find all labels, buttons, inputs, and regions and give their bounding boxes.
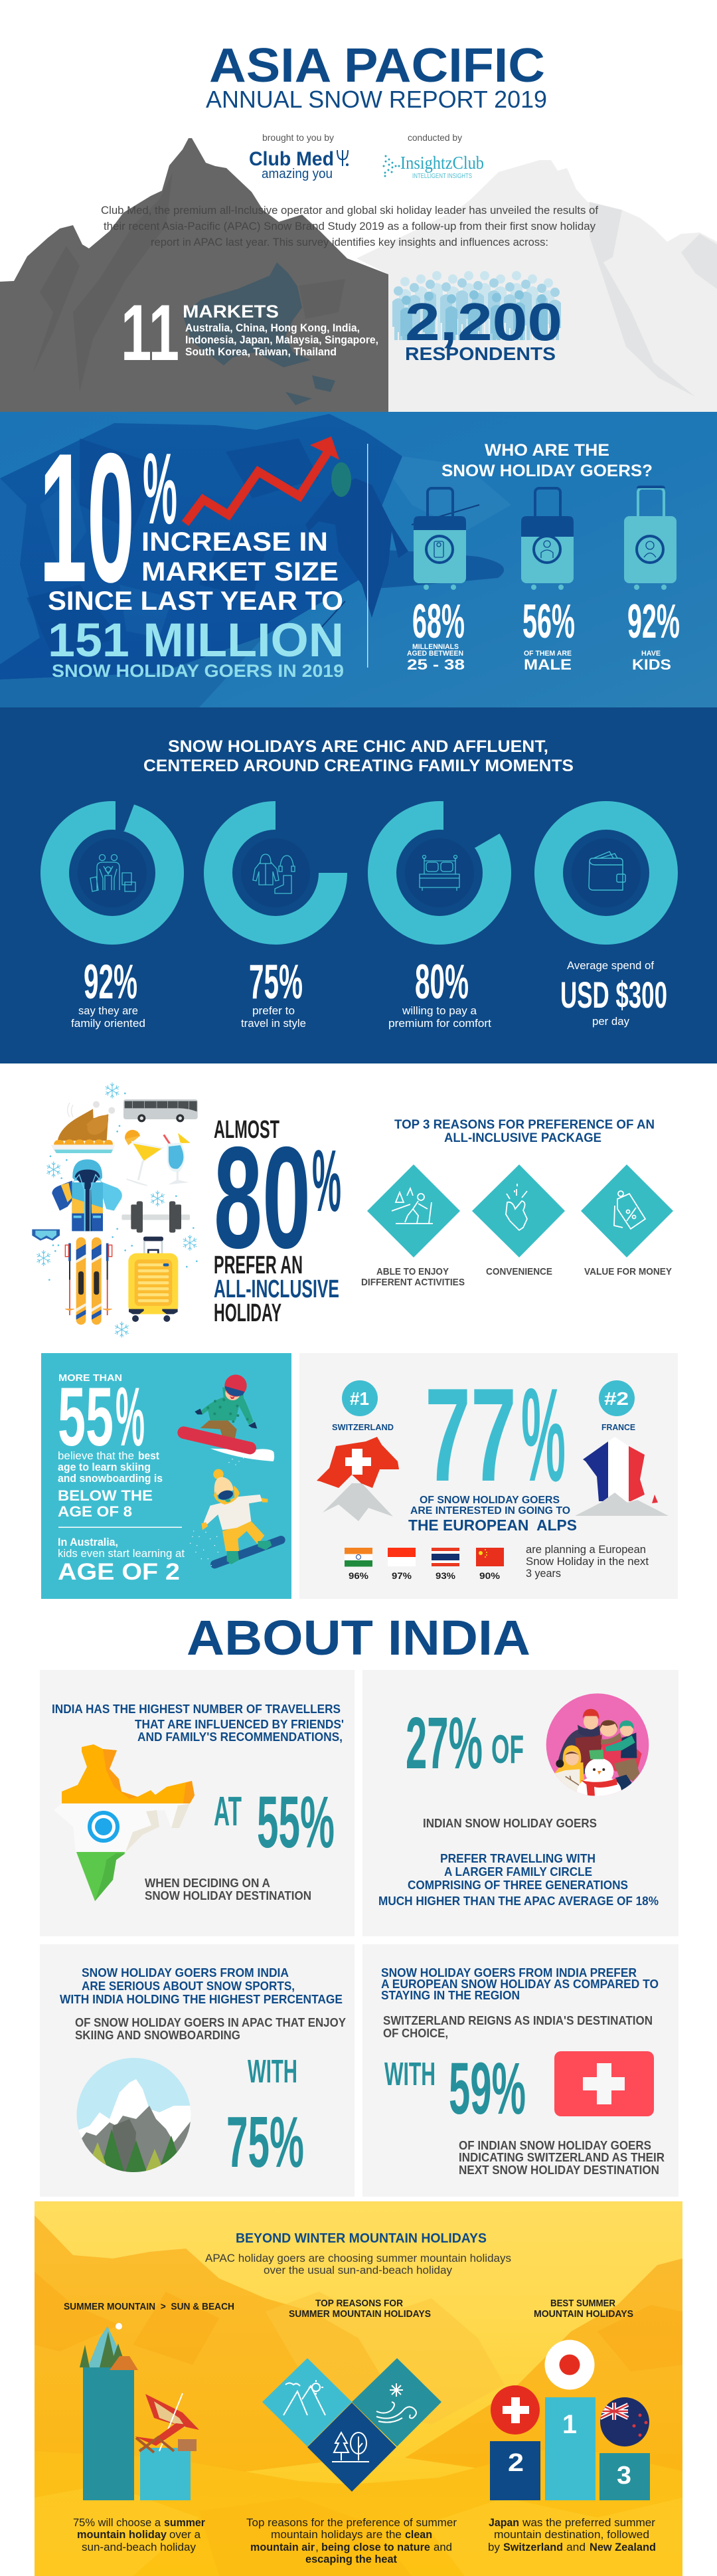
stat: 10%: 10 xyxy=(39,414,135,620)
column: summer vs beach: 75% will choose a xyxy=(73,2516,161,2529)
column: best summer holidays xyxy=(488,2298,656,2553)
column: best summer holidays: and xyxy=(566,2541,586,2553)
illustration: travel items xyxy=(32,1083,198,1338)
podium 2 Switzerland: 2 xyxy=(508,2449,524,2477)
column: summer vs beach: over a xyxy=(169,2528,201,2541)
icon: red growth arrow xyxy=(185,436,339,523)
stat: 2,200 respondents: RESPONDENTS xyxy=(405,343,556,364)
icon: diamond different activities xyxy=(367,1164,460,1257)
stat: 68%: 25 - 38 xyxy=(407,656,465,673)
text: almost 80% prefer: HOLIDAY xyxy=(214,1299,281,1327)
dumbbell xyxy=(121,1201,190,1233)
text: influenced by recommendations: AND FAMILY'S RECOMMENDATIONS, xyxy=(137,1730,343,1744)
text: planning a European snow holiday: Snow Holiday in the next xyxy=(526,1555,649,1568)
text: below the age of 8 xyxy=(58,1449,163,1520)
icon: nature diamond xyxy=(307,2403,396,2492)
stat: 11 markets: MARKETS xyxy=(183,302,279,322)
text: prefer European: SNOW HOLIDAY GOERS FROM INDIA PREFER xyxy=(381,1966,637,1979)
stat: 27% of: OF xyxy=(491,1727,524,1772)
text: next destination xyxy=(459,2139,665,2177)
stat: 56%: 56% xyxy=(522,595,575,648)
column: top reasons: SUMMER MOUNTAIN HOLIDAYS xyxy=(289,2308,431,2320)
flag: Thailand: 93% xyxy=(436,1570,456,1581)
column: summer vs beach: sun-and-beach holiday xyxy=(82,2541,196,2553)
panel: european alps: % xyxy=(521,1361,566,1509)
stat: 68%: 68% xyxy=(412,595,465,648)
text: larger family: MUCH HIGHER THAN THE APAC AVERAGE OF 18% xyxy=(378,1894,659,1908)
stat: 75% travel in style: travel in style xyxy=(241,1017,306,1030)
badge: #1 Switzerland xyxy=(332,1380,394,1432)
text: below the age of 8: best xyxy=(138,1449,159,1462)
logo: InsightzClub: INTELLIGENT INSIGHTS xyxy=(412,173,472,180)
heading xyxy=(143,737,574,775)
panel: India recommendations xyxy=(40,1670,355,1936)
donut: 92 percent family xyxy=(54,797,170,930)
text: interested in the european alps: ARE INTERESTED IN GOING TO xyxy=(410,1505,570,1517)
column: top reasons: and xyxy=(434,2541,452,2553)
brought to you by: brought to you by xyxy=(262,132,334,143)
icon: suitcase 68% xyxy=(414,488,466,590)
icon: Switzerland map xyxy=(317,1437,399,1521)
donut: 75 percent style xyxy=(218,797,352,930)
stat: with 75%: WITH xyxy=(248,2054,297,2090)
stat: 75% travel in style: prefer to xyxy=(252,1004,295,1017)
icon: India map flag xyxy=(54,1744,195,1901)
column: top reasons: mountain holidays are the xyxy=(271,2528,402,2541)
heading: who are the goers: SNOW HOLIDAY GOERS? xyxy=(441,462,653,480)
bar: sun and beach xyxy=(140,2448,191,2500)
text: almost 80% prefer xyxy=(214,1116,341,1327)
illustration: snowboarders xyxy=(184,1374,281,1566)
podium 2 Switzerland xyxy=(490,2385,540,2500)
text: prefer European: SWITZERLAND REIGNS AS INDIA'S DESTINATION xyxy=(383,2014,653,2027)
text: next destination: NEXT SNOW HOLIDAY DESTINATION xyxy=(459,2163,659,2177)
column: best summer holidays: Japan xyxy=(489,2516,519,2529)
stat: 55%: MORE THAN xyxy=(58,1372,122,1384)
podium 3 New Zealand: 3 xyxy=(617,2462,631,2490)
donut: spend xyxy=(548,816,664,930)
stat: 92%: KIDS xyxy=(632,656,671,673)
stat: 92% family oriented: 92% xyxy=(84,955,137,1009)
snowboarder yellow xyxy=(190,1457,281,1566)
column: best summer holidays: by xyxy=(488,2541,500,2553)
text: planning a European snow holiday xyxy=(526,1543,649,1580)
stat: 2,200 respondents: 2,200 xyxy=(405,292,562,351)
badge: #2 France: #2 xyxy=(604,1388,629,1409)
bus xyxy=(123,1099,198,1122)
text: almost 80% prefer: ALMOST xyxy=(214,1116,279,1144)
icon: crowd of people xyxy=(392,271,561,340)
stat: USD $300 xyxy=(560,959,667,1028)
text: snow holiday goers in 2019: SNOW HOLIDAY GOERS IN 2019 xyxy=(52,661,344,681)
column: top reasons: Top reasons for the preference of summer xyxy=(246,2516,457,2529)
icon: suitcase 92% xyxy=(624,487,677,590)
heading: BEYOND WINTER MOUNTAIN HOLIDAYS xyxy=(236,2231,487,2246)
text: when deciding: WHEN DECIDING ON A xyxy=(145,1877,270,1890)
text: larger family xyxy=(378,1852,659,1908)
badge: #2 France xyxy=(599,1380,635,1432)
heading: about India: ABOUT INDIA xyxy=(187,1610,530,1665)
bar: summer mountain xyxy=(83,2367,134,2500)
cocktails xyxy=(125,1130,191,1186)
stat: 56% xyxy=(522,595,575,673)
panel: european alps xyxy=(299,1353,678,1599)
logo: Club Med xyxy=(249,148,349,181)
text: snow sports: SKIING AND SNOWBOARDING xyxy=(75,2029,240,2042)
stat: 56%: OF THEM ARE xyxy=(524,650,572,658)
stat: 92% xyxy=(627,595,680,673)
text: below the age of 8: BELOW THE xyxy=(58,1487,153,1504)
stat: 68%: AGED BETWEEN xyxy=(407,650,463,658)
stat: 10% xyxy=(39,414,177,620)
panel: header with mountains xyxy=(0,48,717,412)
stat: 92%: HAVE xyxy=(641,650,661,658)
stat: 11 markets xyxy=(121,288,378,377)
panel: best age to learn xyxy=(41,1353,291,1599)
text: larger family: A LARGER FAMILY CIRCLE xyxy=(444,1865,592,1879)
stat: 56%: MALE xyxy=(524,656,572,673)
text: % xyxy=(312,1132,341,1230)
badge: #1 Switzerland: #1 xyxy=(350,1388,369,1409)
text: planning a European snow holiday: 3 years xyxy=(526,1567,561,1580)
heading: top 3 reasons xyxy=(394,1118,655,1145)
goggles xyxy=(32,1230,60,1241)
text: snow sports: OF SNOW HOLIDAY GOERS IN APAC THAT ENJOY xyxy=(75,2016,346,2029)
heading: APAC holiday goers are choosing summer mountain holidays xyxy=(205,2252,511,2264)
stat: 92% family oriented: family oriented xyxy=(71,1017,145,1030)
stat: with 59%: 59% xyxy=(449,2048,526,2130)
label: able to enjoy different activities: DIFFERENT ACTIVITIES xyxy=(361,1277,465,1288)
text: when deciding xyxy=(145,1877,311,1902)
roast chicken xyxy=(51,1101,115,1153)
stat: 80% premium for comfort: willing to pay a xyxy=(402,1004,477,1017)
skis and poles xyxy=(65,1238,112,1325)
stat: 11 markets: Indonesia, Japan, Malaysia, Singapore, xyxy=(185,333,378,346)
stat: 77%: 77 xyxy=(425,1361,517,1509)
label: convenience: CONVENIENCE xyxy=(486,1266,552,1277)
snowflakes xyxy=(37,1083,197,1338)
stat: 55%: 55 xyxy=(58,1371,114,1463)
heading: CENTERED AROUND CREATING FAMILY MOMENTS xyxy=(143,757,574,775)
title: ASIA PACIFIC xyxy=(209,39,545,92)
column: best summer holidays: MOUNTAIN HOLIDAYS xyxy=(534,2308,633,2320)
icon: diamond convenience xyxy=(472,1164,565,1257)
flag: India xyxy=(345,1548,372,1581)
heading xyxy=(205,2231,511,2276)
heading: top 3 reasons: TOP 3 REASONS FOR PREFERENCE OF AN xyxy=(394,1118,655,1132)
text: almost 80% prefer: PREFER AN xyxy=(214,1251,303,1279)
intro text: their recent Asia-Pacific (APAC) Snow Brand Study 2019 as a follow-up from their first snow holiday xyxy=(104,220,596,232)
dark mountain facets xyxy=(33,173,345,392)
flag: Indonesia: 97% xyxy=(392,1570,412,1581)
column: top reasons xyxy=(246,2298,457,2565)
text: almost 80% prefer: ALL-INCLUSIVE xyxy=(214,1275,339,1303)
label: able to enjoy different activities: ABLE TO ENJOY xyxy=(376,1266,449,1277)
light mountain xyxy=(357,160,717,412)
stat: USD $300: Average spend of xyxy=(567,959,654,972)
illustration: family with snowman xyxy=(546,1693,649,1807)
heading: increase in market size: MARKET SIZE xyxy=(141,557,339,587)
intro text: report in APAC last year. This survey identifies key insights and influences across: xyxy=(151,236,548,248)
text: prefer European: STAYING IN THE REGION xyxy=(381,1989,520,2002)
stat: 27% of: 27% xyxy=(406,1702,483,1784)
stat: at 55%: AT xyxy=(214,1789,242,1835)
icon: mountain and tent xyxy=(80,2323,138,2370)
column: top reasons: being close to nature xyxy=(321,2541,430,2553)
intro text: Club Med, the premium all-Inclusive operator and global ski holiday leader has unveiled the results of xyxy=(101,204,598,217)
panel: beyond winter xyxy=(35,2201,682,2576)
heading: over the usual sun-and-beach holiday xyxy=(264,2264,452,2276)
flag: India: 96% xyxy=(349,1570,369,1581)
icon: suitcase 56% xyxy=(521,488,574,590)
column: best summer holidays: mountain destination, followed xyxy=(494,2528,649,2541)
text: snow sports: SNOW HOLIDAY GOERS FROM INDIA xyxy=(82,1966,289,1979)
text: planning a European snow holiday: are planning a European xyxy=(526,1543,646,1556)
donut: 80 percent comfort xyxy=(382,797,524,930)
heading: top 3 reasons: ALL-INCLUSIVE PACKAGE xyxy=(444,1131,601,1145)
flag: Thailand xyxy=(432,1548,459,1581)
stat: 75% travel in style: 75% xyxy=(249,955,303,1009)
text: Indian snow holiday goers: INDIAN SNOW HOLIDAY GOERS xyxy=(423,1817,597,1830)
stat: 11 markets: 11 xyxy=(121,288,179,377)
panel: best age to learn: % xyxy=(116,1371,145,1463)
text: age of 2 xyxy=(58,1536,185,1585)
text: age of 2: kids even start learning at xyxy=(58,1547,185,1560)
stat: 68% xyxy=(407,595,465,673)
yellow suitcase xyxy=(128,1237,178,1322)
flag: China: 90% xyxy=(479,1570,501,1581)
column: top reasons: , xyxy=(315,2541,319,2553)
heading: who are the goers xyxy=(441,441,653,480)
heading: increase in market size: SINCE LAST YEAR TO xyxy=(48,587,343,616)
text: prefer European: OF CHOICE, xyxy=(383,2027,448,2040)
text: interested in the european alps: THE EUROPEAN ALPS xyxy=(408,1517,577,1534)
text: below the age of 8: and snowboarding is xyxy=(58,1472,163,1485)
text: below the age of 8: believe that the xyxy=(58,1449,134,1462)
text: next destination: INDICATING SWITZERLAND AS THEIR xyxy=(459,2151,665,2164)
text: prefer European xyxy=(381,1966,659,2040)
flag: Indonesia xyxy=(388,1548,416,1581)
heading: who are the goers: WHO ARE THE xyxy=(485,441,609,460)
panel: chic and affluent xyxy=(0,707,717,1063)
stat: with 75% xyxy=(226,2054,304,2183)
column: top reasons: clean xyxy=(405,2528,432,2541)
logo: Club Med: Club Med xyxy=(249,148,334,170)
column: best summer holidays: New Zealand xyxy=(590,2541,656,2553)
stat: 68%: MILLENNIALS xyxy=(412,643,459,651)
heading: increase in market size: INCREASE IN xyxy=(141,527,328,557)
text: snow sports: WITH INDIA HOLDING THE HIGHEST PERCENTAGE xyxy=(60,1993,343,2006)
stat: at 55% xyxy=(214,1782,335,1863)
panel: serious about snow sports xyxy=(40,1944,355,2197)
text: below the age of 8: AGE OF 8 xyxy=(58,1503,132,1520)
stat: with 75%: 75% xyxy=(226,2102,304,2183)
podium 1 Japan xyxy=(544,2340,596,2500)
podium 1 Japan: 1 xyxy=(562,2410,577,2439)
icon: escaping the heat diamond xyxy=(352,2358,441,2446)
light mountain facets xyxy=(590,202,717,397)
icon: clean mountain air diamond xyxy=(262,2358,352,2446)
text: when deciding: SNOW HOLIDAY DESTINATION xyxy=(145,1889,311,1902)
column: top reasons: mountain air xyxy=(250,2541,315,2553)
text: influenced by recommendations: INDIA HAS THE HIGHEST NUMBER OF TRAVELLERS xyxy=(52,1702,341,1716)
column: summer vs beach: summer xyxy=(164,2516,205,2529)
icon: Swiss flag xyxy=(554,2051,654,2116)
stat: 92% family oriented xyxy=(71,955,145,1030)
stat: 2,200 respondents xyxy=(405,292,562,364)
ski jacket xyxy=(52,1159,122,1231)
text: influenced by recommendations xyxy=(52,1702,344,1744)
text: below the age of 8: age to learn skiing xyxy=(58,1461,151,1473)
dark mountain xyxy=(0,138,388,412)
badge: #2 France: FRANCE xyxy=(601,1422,635,1432)
text: age of 2: In Australia, xyxy=(58,1536,118,1548)
stat: with 59%: WITH xyxy=(384,2057,436,2092)
column: best summer holidays: BEST SUMMER xyxy=(550,2298,615,2309)
column: summer vs beach: SUMMER MOUNTAIN > SUN & BEACH xyxy=(64,2301,234,2312)
column: best summer holidays: was the preferred summer xyxy=(522,2516,655,2529)
stat: 92% family oriented: say they are xyxy=(78,1004,138,1017)
Asia map xyxy=(183,262,335,405)
text: snow sports xyxy=(60,1966,346,2042)
heading: increase in market size xyxy=(48,527,343,616)
mountain background xyxy=(0,414,402,680)
column: summer vs beach xyxy=(64,2301,234,2553)
stat: 151 million: 151 MILLION xyxy=(48,614,344,667)
snowboarder red xyxy=(184,1374,274,1461)
text: interested in the european alps: OF SNOW HOLIDAY GOERS xyxy=(420,1495,560,1506)
stat: with 59% xyxy=(384,2048,526,2130)
stat: 11 markets: Australia, China, Hong Kong, India, xyxy=(185,322,360,334)
text: next destination: OF INDIAN SNOW HOLIDAY GOERS xyxy=(459,2139,651,2152)
flag: China xyxy=(476,1548,504,1581)
podium 3 New Zealand xyxy=(599,2397,650,2500)
column: top reasons: escaping the heat xyxy=(305,2553,397,2565)
text: age of 2: AGE OF 2 xyxy=(58,1559,180,1585)
logo: InsightzClub: InsightzClub xyxy=(400,153,484,173)
text: interested in the european alps xyxy=(408,1495,577,1534)
panel: market size and goers: % xyxy=(143,432,177,545)
stat: 80% premium for comfort: 80% xyxy=(415,955,469,1009)
badge: #1 Switzerland: SWITZERLAND xyxy=(332,1422,394,1432)
illustration: mountain in circle xyxy=(73,2058,193,2179)
subtitle: ANNUAL SNOW REPORT 2019 xyxy=(206,86,547,113)
column: best summer holidays: Switzerland xyxy=(503,2541,563,2553)
intro text xyxy=(101,204,598,248)
stat: 75% travel in style xyxy=(241,955,306,1030)
icon: France map xyxy=(575,1435,669,1516)
text: snow sports: ARE SERIOUS ABOUT SNOW SPORTS, xyxy=(82,1979,295,1993)
label: able to enjoy different activities xyxy=(361,1266,465,1288)
text: prefer European: A EUROPEAN SNOW HOLIDAY AS COMPARED TO xyxy=(381,1978,659,1991)
icon: beach chair and umbrella xyxy=(135,2393,199,2452)
panel: European snow holiday preference xyxy=(362,1944,678,2197)
heading: SNOW HOLIDAYS ARE CHIC AND AFFLUENT, xyxy=(168,737,548,756)
stat: at 55%: 55% xyxy=(257,1782,335,1863)
stat: 80% premium for comfort: premium for comfort xyxy=(388,1017,491,1030)
stat: 11 markets: South Korea, Taiwan, Thailand xyxy=(185,345,337,358)
logo: InsightzClub xyxy=(382,153,484,180)
label: value for money: VALUE FOR MONEY xyxy=(584,1266,672,1277)
logo: Club Med: amazing you xyxy=(262,167,333,181)
skier xyxy=(305,462,504,638)
text: larger family: COMPRISING OF THREE GENERATIONS xyxy=(408,1879,628,1892)
icon: diamond value for money xyxy=(581,1164,673,1257)
text: almost 80% prefer: 80 xyxy=(214,1117,311,1279)
text: influenced by recommendations: THAT ARE INFLUENCED BY FRIENDS' xyxy=(135,1718,344,1731)
text: larger family: PREFER TRAVELLING WITH xyxy=(440,1852,596,1865)
stat: USD $300: per day xyxy=(592,1015,629,1028)
conducted by: conducted by xyxy=(408,132,462,143)
stat: 80% premium for comfort xyxy=(388,955,491,1030)
panel: larger family circle xyxy=(362,1670,678,1936)
column: top reasons: TOP REASONS FOR xyxy=(315,2298,403,2309)
column: summer vs beach: mountain holiday xyxy=(77,2528,167,2541)
panel: market size and goers xyxy=(0,412,717,707)
